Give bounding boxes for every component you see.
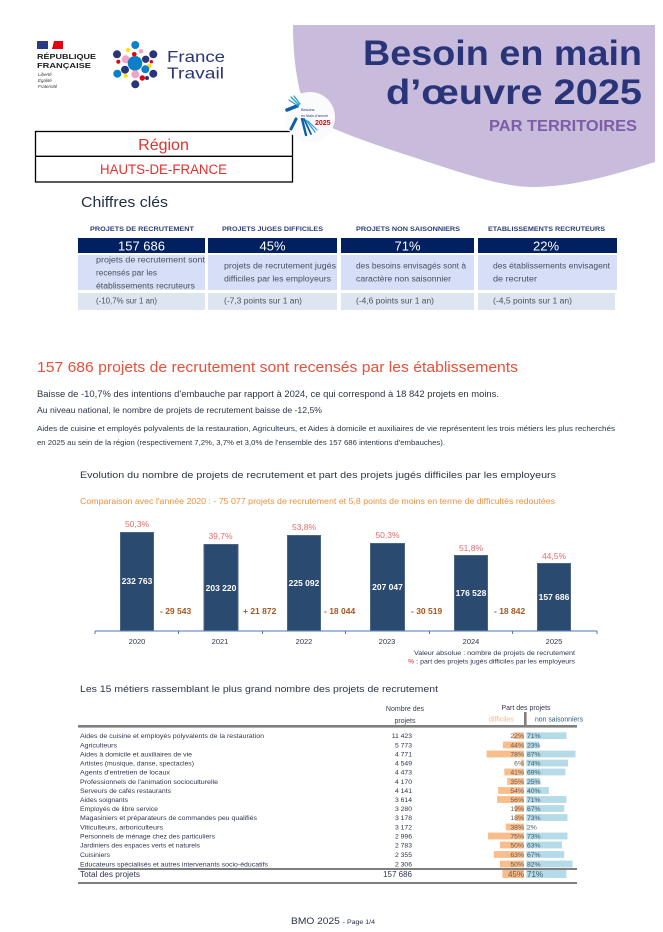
- row: personnels de ménage: [80, 833, 568, 840]
- row: aides à domicile: 78%: [510, 751, 524, 758]
- row: total: 71%: [527, 870, 543, 879]
- text block: summary: Baisse de -10,7% des intentions d'embauche par rapport à 2024, ce qui correspond à 18 842 projets en moins.: [37, 389, 499, 399]
- row: viticulteurs: 38%: [510, 824, 524, 831]
- table header: non saisonniers: [535, 716, 583, 724]
- bar chart: projets de recrutement par année: - 29 543: [160, 606, 191, 616]
- badge: Besoins en main-d'œuvre 2025: en Main-d’œuvre: [301, 114, 328, 118]
- key figure: projets de recrutement: projets de recrutement sont: [96, 256, 206, 264]
- row: employés de libre service: 3 280: [395, 806, 412, 813]
- row: animation socioculturelle: Professionnels de l'animation socioculturelle: [80, 779, 218, 786]
- row: éducateurs: 50%: [510, 861, 524, 868]
- bar chart: projets de recrutement par année: 225 092: [289, 578, 320, 588]
- row: artistes: 4 549: [395, 760, 412, 767]
- logo: République Française: Liberté: [38, 72, 52, 77]
- key figure: projets de recrutement: PROJETS DE RECRUTEMENT: [90, 226, 194, 233]
- row: agriculteurs: 5 773: [395, 742, 412, 749]
- bar chart: projets de recrutement par année: 157 686: [539, 592, 570, 602]
- key figure: projets jugés difficiles: 45%: [259, 238, 286, 254]
- bar chart: projets de recrutement par année: 207 047: [372, 582, 403, 592]
- row: aides de cuisine: 11 423: [392, 733, 412, 740]
- footer: page number: BMO 2025 - Page 1/4: [291, 916, 375, 927]
- header banner: lilac shape with title: d’œuvre 2025: [386, 72, 642, 112]
- logo: République Française: FRANÇAISE: [37, 61, 91, 70]
- key figure: établissements recruteurs: 22%: [533, 238, 559, 254]
- key figure: établissements recruteurs: ETABLISSEMENTS RECRUTEURS: [488, 226, 606, 233]
- row: total: 157 686: [383, 870, 413, 879]
- key figure: projets non saisonniers: (-4,6 points sur 1 an): [356, 296, 434, 306]
- row: aides de cuisine: 22%: [510, 733, 524, 740]
- key figure: projets non saisonniers: caractère non saisonnier: [356, 274, 451, 284]
- row: total: 45%: [508, 870, 524, 879]
- key figure: projets de recrutement: [78, 226, 206, 310]
- table header: difficiles: [489, 716, 514, 724]
- bar chart: projets de recrutement par année: 39,7%: [208, 531, 233, 541]
- row: personnels de ménage: 75%: [510, 833, 524, 840]
- row: éducateurs: Educateurs spécialisés et autres intervenants socio-éducatifs: [80, 861, 269, 868]
- row: aides soignants: 71%: [527, 797, 541, 804]
- bar chart: projets de recrutement par année: 2022: [296, 637, 312, 646]
- chart legend note: [408, 650, 576, 666]
- row: animation socioculturelle: 35%: [510, 779, 524, 786]
- row: viticulteurs: 3 172: [395, 824, 412, 831]
- text block: summary: en 2025 au sein de la région (respectivement 7,2%, 3,7% et 3,0% de l'ensemble des 157 686 intentions d'embauches).: [37, 438, 445, 447]
- row: aides soignants: 3 614: [395, 797, 412, 804]
- header banner: lilac shape with title: [293, 25, 655, 187]
- row: aides soignants: [80, 796, 566, 804]
- bar chart: projets de recrutement par année: - 18 842: [494, 606, 525, 616]
- row: cuisiniers: Cuisiniers: [80, 852, 111, 859]
- row: animation socioculturelle: 4 170: [395, 779, 412, 786]
- row: serveurs: 4 141: [395, 788, 412, 795]
- row: aides à domicile: [80, 751, 576, 758]
- row: aides à domicile: 87%: [527, 751, 541, 758]
- key figure: projets non saisonniers: [341, 226, 474, 310]
- bar chart: projets de recrutement par année: 51,8%: [459, 543, 483, 553]
- key figure: établissements recruteurs: de recruter: [493, 274, 537, 284]
- key figure: projets jugés difficiles: [208, 226, 337, 310]
- key figure: établissements recruteurs: des établissements envisagent: [493, 262, 611, 270]
- row: agriculteurs: 44%: [510, 742, 524, 749]
- bar chart: projets de recrutement par année: 50,3%: [375, 530, 400, 540]
- row: agents d'entretien: [80, 769, 565, 776]
- row: jardiniers: 63%: [527, 842, 541, 849]
- badge: Besoins en main-d'œuvre 2025: [285, 92, 335, 142]
- row: aides soignants: Aides soignants: [80, 797, 129, 804]
- row: serveurs: 40%: [527, 788, 541, 795]
- row: viticulteurs: Viticulteurs, arboriculteurs: [80, 824, 164, 831]
- bar chart: projets de recrutement par année: [95, 519, 597, 646]
- row: agents d'entretien: 69%: [527, 769, 541, 776]
- row: employés de libre service: [80, 805, 564, 813]
- row: agents d'entretien: 4 473: [395, 769, 412, 776]
- row: aides de cuisine: Aides de cuisine et employés polyvalents de la restauration: [80, 733, 264, 740]
- row: personnels de ménage: 2 996: [395, 833, 412, 840]
- row: agriculteurs: 23%: [527, 742, 541, 749]
- bar chart: projets de recrutement par année: 2025: [546, 637, 562, 646]
- bar chart: projets de recrutement par année: 53,8%: [292, 522, 316, 532]
- region box: Région: [138, 137, 189, 154]
- row: éducateurs: [80, 861, 573, 868]
- key figure: établissements recruteurs: (-4,5 points sur 1 an): [493, 296, 572, 306]
- text block: summary: Aides de cuisine et employés polyvalents de la restauration, Agriculteurs, et Aides à domicile et auxiliaires de vie représentent les trois métiers les plus recherchés: [37, 424, 615, 433]
- bar chart: projets de recrutement par année: - 30 519: [411, 606, 442, 616]
- row: jardiniers: 2 783: [395, 842, 412, 849]
- bar chart: projets de recrutement par année: 2023: [379, 637, 395, 646]
- row: magasiniers: Magasiniers et préparateurs de commandes peu qualifiés: [80, 815, 258, 822]
- row: magasiniers: 73%: [527, 815, 541, 822]
- row: agents d'entretien: 41%: [510, 769, 524, 776]
- row: magasiniers: 3 178: [395, 815, 412, 822]
- row: magasiniers: [80, 814, 568, 822]
- row: éducateurs: 82%: [527, 861, 541, 868]
- row: aides à domicile: Aides à domicile et auxiliaires de vie: [80, 751, 192, 758]
- logo: France Travail: France: [167, 49, 225, 66]
- chart legend note: Valeur absolue : nombre de projets de recrutement: [414, 650, 575, 657]
- row: total: Total des projets: [80, 870, 140, 879]
- row: cuisiniers: 2 355: [395, 852, 412, 859]
- bar chart: projets de recrutement par année: 2020: [129, 637, 145, 646]
- table header: projets: [394, 718, 416, 725]
- row: aides soignants: 56%: [510, 797, 524, 804]
- bar chart: projets de recrutement par année: 176 528: [456, 588, 487, 598]
- key figure: projets non saisonniers: PROJETS NON SAISONNIERS: [356, 226, 461, 233]
- key figure: projets de recrutement: recensés par les: [96, 268, 157, 278]
- text block: summary: [37, 389, 615, 447]
- row: employés de libre service: 67%: [527, 806, 541, 813]
- row: employés de libre service: 19%: [510, 806, 524, 813]
- key figure: projets de recrutement: (-10,7% sur 1 an): [96, 296, 157, 306]
- row: viticulteurs: [80, 824, 537, 831]
- row: aides de cuisine: 71%: [527, 733, 541, 740]
- row: artistes: Artistes (musique, danse, spectacles): [80, 760, 194, 767]
- row: cuisiniers: 63%: [510, 852, 524, 859]
- table header: Part des projets: [501, 705, 551, 712]
- row: total: [78, 868, 577, 884]
- chart legend note: % : part des projets jugés difficiles par les employeurs: [408, 658, 576, 666]
- key figure: projets non saisonniers: 71%: [394, 238, 421, 254]
- row: cuisiniers: [80, 851, 564, 859]
- key figure: projets de recrutement: 157 686: [118, 238, 165, 254]
- row: serveurs: 54%: [510, 788, 524, 795]
- row: artistes: 74%: [527, 760, 541, 767]
- row: agriculteurs: Agriculteurs: [80, 742, 118, 749]
- bar chart: projets de recrutement par année: 50,3%: [125, 519, 149, 529]
- logo: République Française: Égalité: [38, 77, 52, 83]
- table: 15 métiers: [78, 705, 583, 884]
- key figure: projets non saisonniers: des besoins envisagés sont à: [356, 262, 467, 270]
- table header: Nombre des: [386, 706, 425, 713]
- key figure: projets jugés difficiles: PROJETS JUGES DIFFICILES: [222, 226, 324, 233]
- logo: France Travail: [113, 41, 225, 88]
- logo: République Française: RÉPUBLIQUE: [37, 52, 96, 61]
- key figure: projets de recrutement: établissements recruteurs: [96, 282, 195, 290]
- key figure: projets jugés difficiles: difficiles par les employeurs: [224, 274, 331, 284]
- chart heading: Evolution du nombre de projets de recrutement et part des projets jugés difficiles par les employeurs: [80, 470, 556, 481]
- bar chart: projets de recrutement par année: 232 763: [122, 576, 153, 586]
- header banner: lilac shape with title: Besoin en main: [363, 33, 642, 73]
- section heading: 157 686 projets de recrutement sont recensés par les établissements: [37, 359, 518, 376]
- key figure: établissements recruteurs: [478, 226, 617, 310]
- row: magasiniers: 18%: [510, 815, 524, 822]
- row: employés de libre service: Employés de libre service: [80, 806, 158, 813]
- row: personnels de ménage: Personnels de ménage chez des particuliers: [80, 833, 216, 840]
- row: jardiniers: Jardiniers des espaces verts et naturels: [80, 842, 201, 849]
- row: serveurs: Serveurs de cafés restaurants: [80, 788, 172, 795]
- row: agriculteurs: [80, 742, 541, 749]
- region box: HAUTS-DE-FRANCE: [100, 162, 227, 177]
- row: animation socioculturelle: [80, 778, 541, 786]
- row: éducateurs: 2 306: [395, 861, 412, 868]
- row: cuisiniers: 67%: [527, 852, 541, 859]
- row: animation socioculturelle: 25%: [527, 779, 541, 786]
- chart subheading: Comparaison avec l'année 2020 : - 75 077 projets de recrutement et 5,8 points de moins en terme de difficultés redoutées: [80, 497, 555, 506]
- key figure: projets jugés difficiles: (-7,3 points sur 1 an): [224, 296, 302, 306]
- header banner: lilac shape with title: PAR TERRITOIRES: [489, 118, 637, 135]
- row: aides de cuisine: [80, 732, 566, 740]
- badge: Besoins en main-d'œuvre 2025: Besoins: [301, 108, 315, 112]
- bar chart: projets de recrutement par année: 44,5%: [542, 551, 566, 561]
- text block: summary: Au niveau national, le nombre de projets de recrutement baisse de -12,5%: [37, 406, 322, 415]
- bar chart: projets de recrutement par année: 2021: [212, 637, 228, 646]
- row: artistes: 6%: [514, 760, 524, 767]
- row: personnels de ménage: 73%: [527, 833, 541, 840]
- table header: [78, 705, 583, 728]
- key figure: projets jugés difficiles: projets de recrutement jugés: [224, 262, 336, 270]
- logo: République Française: Fraternité: [38, 84, 58, 89]
- heading: Chiffres clés: Chiffres clés: [81, 194, 168, 211]
- logo: République Française: [37, 41, 96, 89]
- table heading: Les 15 métiers rassemblant le plus grand nombre des projets de recrutement: [80, 684, 438, 695]
- row: jardiniers: [80, 842, 562, 849]
- bar chart: projets de recrutement par année: 203 220: [206, 583, 237, 593]
- region box: [36, 132, 292, 182]
- row: aides à domicile: 4 771: [395, 751, 412, 758]
- row: artistes: [80, 760, 568, 767]
- row: jardiniers: 50%: [510, 842, 524, 849]
- bar chart: projets de recrutement par année: - 18 044: [324, 606, 355, 616]
- bar chart: projets de recrutement par année: + 21 872: [243, 606, 277, 616]
- badge: Besoins en main-d'œuvre 2025: 2025: [315, 120, 331, 127]
- logo: France Travail: Travail: [167, 66, 224, 82]
- row: serveurs: [80, 787, 549, 795]
- row: agents d'entretien: Agents d'entretien de locaux: [80, 769, 171, 776]
- bar chart: projets de recrutement par année: 2024: [463, 637, 479, 646]
- row: viticulteurs: 2%: [527, 824, 537, 831]
